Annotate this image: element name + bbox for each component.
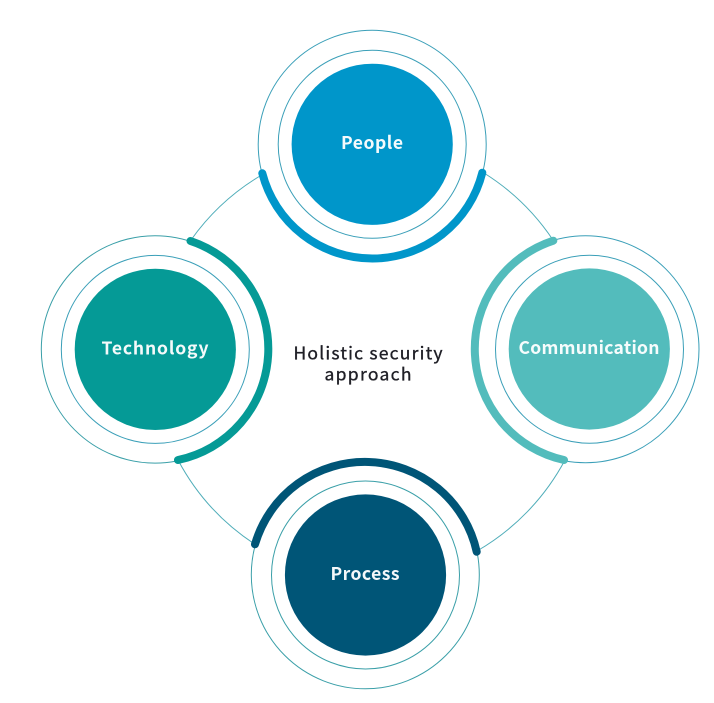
node: Process: Process: [330, 561, 400, 586]
center label: approach: [324, 362, 412, 386]
center label: [294, 340, 442, 386]
node: Communication: [472, 236, 699, 463]
node: Process: [251, 461, 479, 689]
connector arcs between circles: [178, 173, 565, 551]
node: People: [258, 30, 486, 259]
node: Technology: [41, 236, 269, 463]
center label: Holistic security: [294, 340, 442, 366]
node: Technology: Technology: [102, 335, 208, 360]
node: People: People: [341, 130, 403, 155]
node: Communication: Communication: [518, 335, 660, 360]
